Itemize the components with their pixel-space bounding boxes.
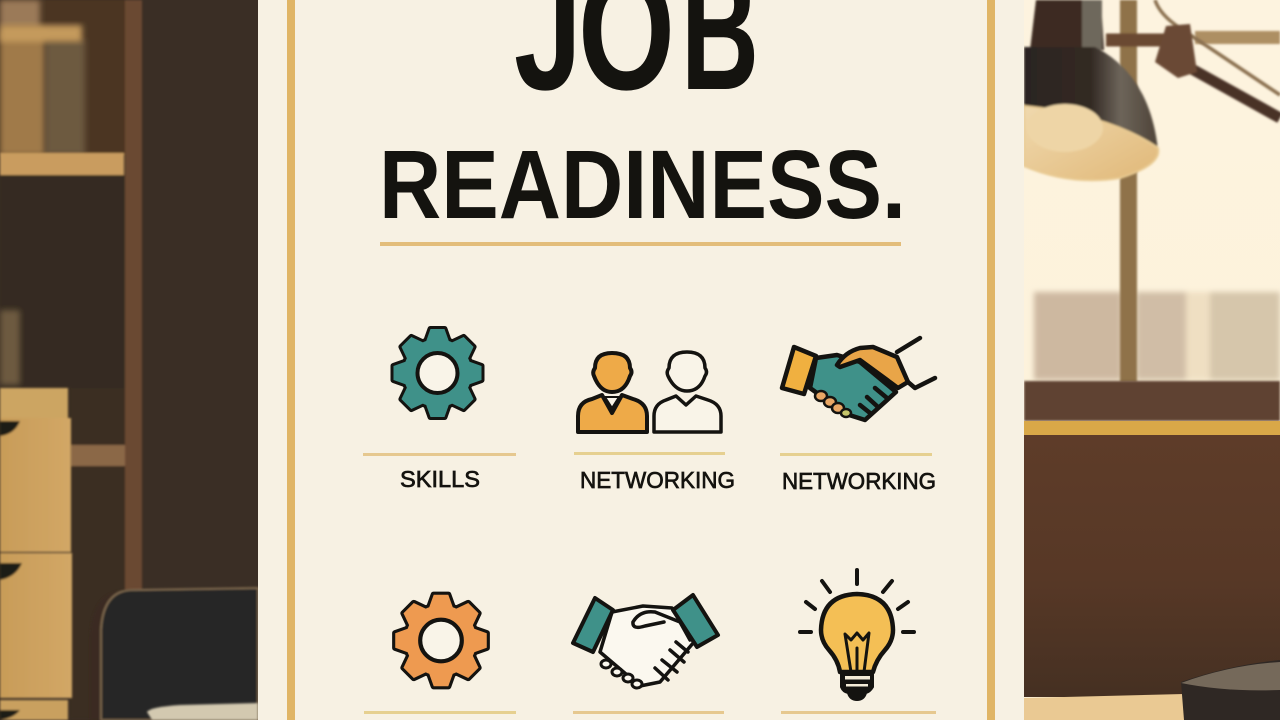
divider line <box>363 453 516 456</box>
window sill and gold strip <box>1024 381 1280 421</box>
icon: colored handshake <box>782 338 935 420</box>
divider line <box>574 452 725 455</box>
item: idea light bulb <box>781 570 936 714</box>
item: networking people <box>574 352 735 493</box>
bookshelf interior <box>0 0 142 718</box>
title underline <box>380 242 901 246</box>
label: SKILLS <box>400 466 480 492</box>
icon: light bulb <box>800 570 914 700</box>
item: handshake outline <box>573 595 724 714</box>
divider line <box>780 453 932 456</box>
office chair <box>90 587 258 720</box>
title: READINESS. <box>379 130 906 239</box>
divider line <box>781 711 936 714</box>
left background: office shelves <box>0 0 258 720</box>
desk object <box>1181 660 1280 720</box>
item: skills gear <box>363 329 516 492</box>
window frame <box>1120 0 1280 382</box>
lower wall <box>1024 435 1280 697</box>
icon: filled person <box>578 353 647 432</box>
label: NETWORKING <box>782 468 936 494</box>
coffee cup <box>147 703 258 720</box>
stacked cardboard boxes <box>0 388 72 720</box>
title <box>379 0 906 239</box>
panel: poster card <box>258 0 1024 720</box>
icon: orange gear <box>395 595 487 686</box>
item: orange gear <box>364 595 516 714</box>
divider line <box>573 711 724 714</box>
right background: window, lamp and desk <box>1024 0 1280 720</box>
blurred skyline <box>1034 292 1280 380</box>
icon: outlined handshake <box>573 595 718 688</box>
poster left border <box>287 0 295 720</box>
item: networking handshake <box>780 338 936 494</box>
label: NETWORKING <box>580 467 735 493</box>
desk lamp <box>1024 0 1280 180</box>
divider line <box>364 711 516 714</box>
poster right border <box>987 0 995 720</box>
icon: outlined person <box>654 352 721 432</box>
icon: teal gear <box>394 329 482 417</box>
desk <box>1024 694 1184 720</box>
